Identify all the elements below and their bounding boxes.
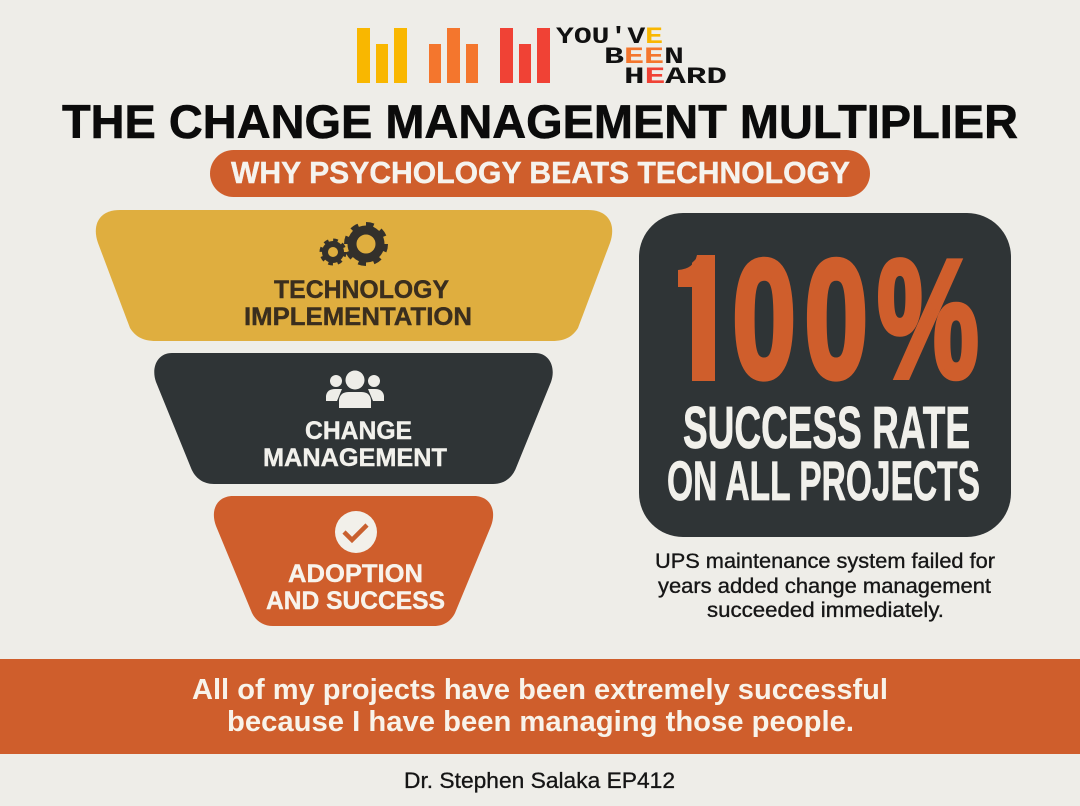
panel: success stat bbox=[639, 213, 1011, 537]
numeral one stem and flag bbox=[678, 255, 715, 381]
stat caption bbox=[667, 395, 980, 512]
funnel tier: change management bbox=[154, 353, 553, 484]
logo wordmark: H E ARD bbox=[624, 64, 727, 90]
stat: 100%: 100% bbox=[670, 226, 979, 413]
footer credit: Dr. Stephen Salaka EP412 bbox=[404, 768, 675, 793]
label: technology implementation: TECHNOLOGY bbox=[274, 276, 449, 304]
label: adoption and success bbox=[266, 560, 445, 615]
label: technology implementation: IMPLEMENTATION bbox=[244, 303, 472, 331]
label: adoption and success: AND SUCCESS bbox=[266, 587, 445, 615]
text block: UPS story: years added change management bbox=[658, 575, 991, 598]
quote banner bbox=[0, 659, 1080, 754]
icon: people bbox=[326, 370, 384, 408]
quote banner: All of my projects have been extremely successful bbox=[192, 674, 888, 706]
icon: gears bbox=[322, 225, 385, 264]
logo wordmark: YOU'V E bbox=[556, 24, 663, 50]
label: change management: MANAGEMENT bbox=[263, 444, 447, 472]
icon: orange bars bbox=[429, 28, 478, 83]
logo wordmark: B EE N bbox=[604, 44, 684, 70]
quote banner: because I have been managing those people. bbox=[227, 706, 854, 738]
label: change management: CHANGE bbox=[305, 417, 412, 445]
logo wordmark bbox=[556, 24, 727, 90]
logo: You've Been Heard bbox=[357, 24, 727, 90]
funnel tier: technology implementation bbox=[96, 210, 612, 341]
icon: yellow bars bbox=[357, 28, 407, 83]
text block: UPS story: UPS maintenance system failed for bbox=[655, 550, 995, 573]
title: THE CHANGE MANAGEMENT MULTIPLIER bbox=[62, 95, 1018, 148]
label: adoption and success: ADOPTION bbox=[288, 560, 423, 588]
icon: check badge bbox=[335, 511, 377, 553]
label: technology implementation bbox=[244, 276, 472, 331]
subtitle pill: WHY PSYCHOLOGY BEATS TECHNOLOGY bbox=[231, 155, 850, 190]
label: change management bbox=[263, 417, 447, 472]
text block: UPS story bbox=[655, 550, 995, 622]
funnel tier: adoption and success bbox=[214, 496, 493, 626]
mask: remove foot serif and flag of numeral one bbox=[655, 250, 733, 388]
text block: UPS story: succeeded immediately. bbox=[707, 599, 944, 622]
icon: red bars bbox=[500, 28, 550, 83]
